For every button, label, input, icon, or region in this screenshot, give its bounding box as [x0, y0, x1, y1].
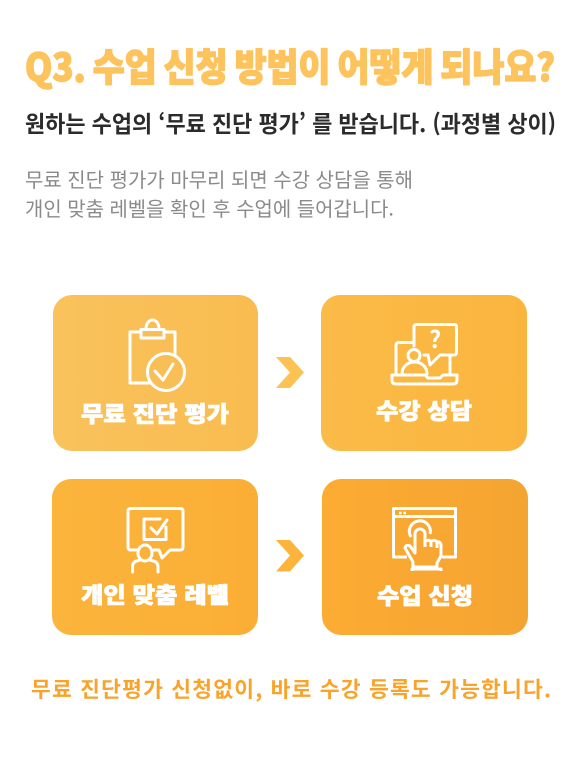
- panel: personalized level: [52, 479, 258, 635]
- icon: laptop consultation: [392, 324, 457, 384]
- panel: course application: [322, 479, 528, 635]
- panel: free diagnostic test: [53, 295, 258, 451]
- icon: person with speech bubble and checkbox: [128, 508, 183, 572]
- arrow: step 1 to 2: [276, 357, 304, 388]
- label: course consultation: 수강 상담: [376, 394, 472, 426]
- icon: question mark: ?: [429, 320, 441, 355]
- description text: 개인 맞춤 레벨을 확인 후 수업에 들어갑니다.: [25, 193, 394, 222]
- description text: 무료 진단 평가가 마무리 되면 수강 상담을 통해: [25, 164, 413, 193]
- subtitle: 원하는 수업의 ‘무료 진단 평가’ 를 받습니다. (과정별 상이): [25, 105, 556, 139]
- arrow: step 3 to 4: [276, 540, 304, 572]
- icon: clipboard with check: [130, 320, 184, 390]
- description text: [25, 164, 413, 222]
- label: course application: 수업 신청: [377, 579, 473, 611]
- footer note: 무료 진단평가 신청없이, 바로 수강 등록도 가능합니다.: [31, 673, 551, 704]
- label: personalized level: 개인 맞춤 레벨: [81, 578, 229, 610]
- icon: window with tapping hand: [394, 508, 456, 571]
- panel: course consultation: [321, 295, 527, 451]
- label: free diagnostic test: 무료 진단 평가: [81, 397, 229, 429]
